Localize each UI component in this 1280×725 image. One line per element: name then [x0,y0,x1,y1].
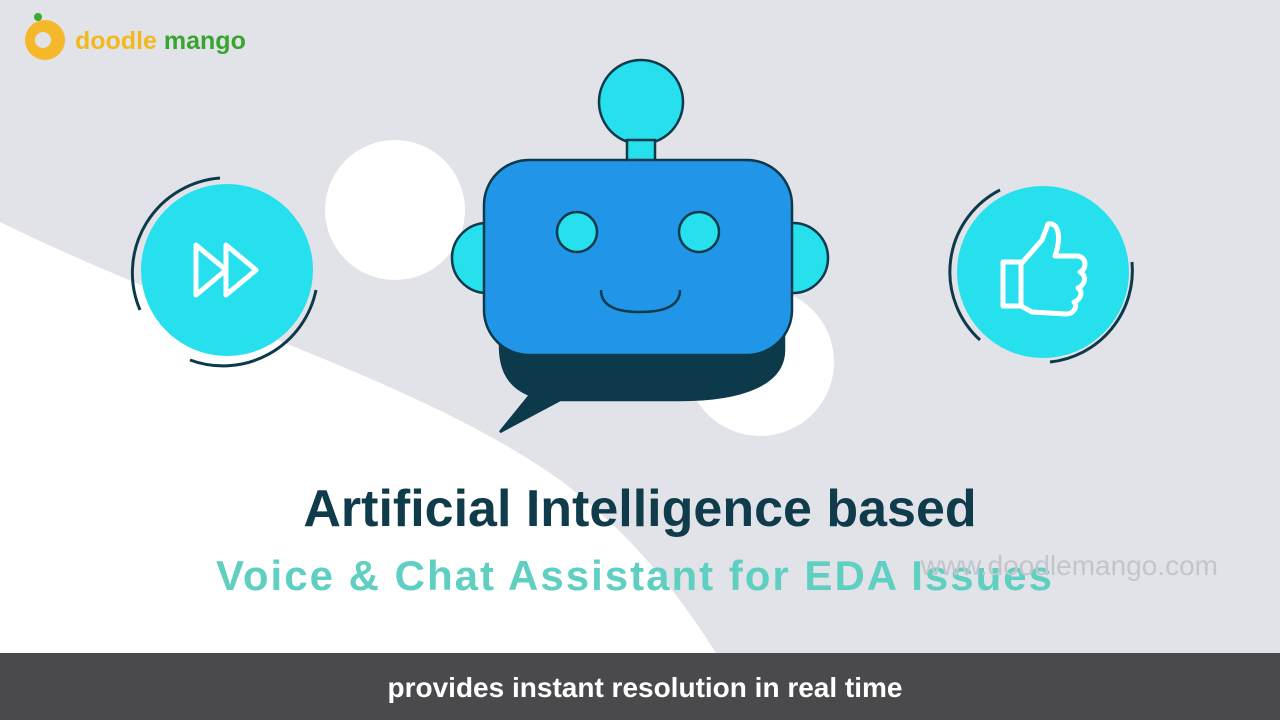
caption bar [0,653,1280,720]
watermark: www.doodlemango.com [920,550,1218,581]
icon: thumbs up [950,186,1132,362]
title: Artificial Intelligence based [303,480,977,538]
logo [25,13,246,60]
robot [452,60,828,432]
icon: fast forward [132,178,316,366]
subtitle: Voice & Chat Assistant for EDA Issues [216,552,1054,599]
caption bar: provides instant resolution in real time [388,672,902,703]
logo: doodle mango [75,27,246,55]
white blobs [325,140,834,436]
